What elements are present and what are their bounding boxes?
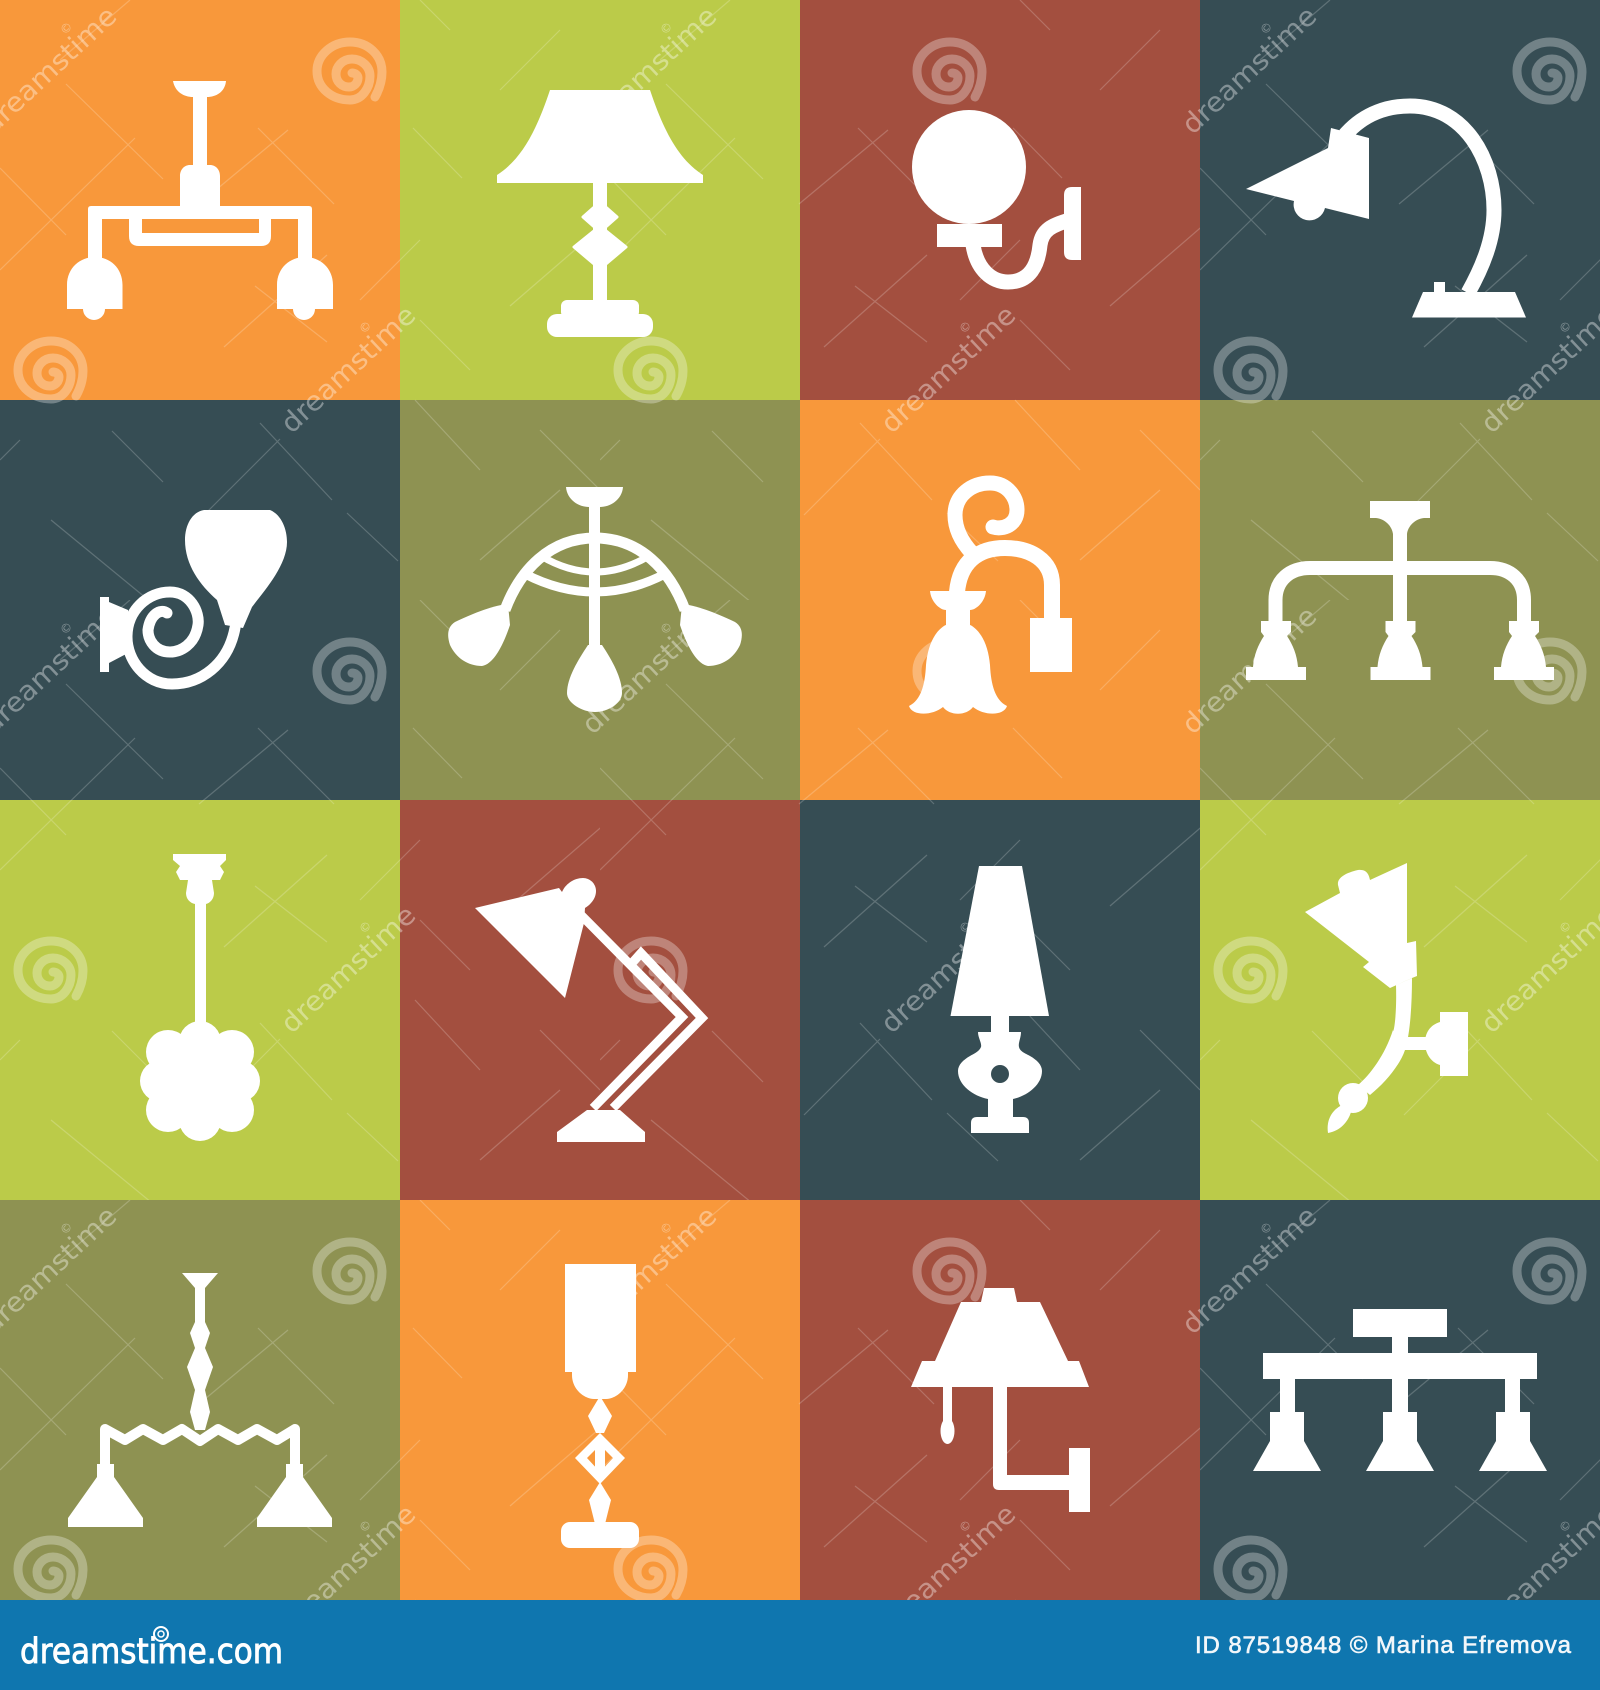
icon: table lamp with flared shade [497,90,703,337]
icon: architect desk lamp [475,878,702,1142]
watermark text: © [657,1219,676,1238]
watermark text: dreamstime [875,900,1022,1040]
watermark text: dreamstime [1176,1,1323,141]
panel: orange chandelier tile [0,0,400,400]
watermark text: © [956,1517,975,1536]
watermark text: dreamstime [875,300,1022,440]
watermark text: dreamstime [275,900,422,1040]
panel: slate bar ceiling lamp tile [1200,1200,1600,1600]
icon: flower sconce with scroll [909,483,1072,714]
watermark text: © [956,918,975,937]
watermark text: dreamstime [576,1201,723,1341]
panel: olive ceiling lamp tile [1200,400,1600,800]
panel: lime curved sconce tile [1200,800,1600,1200]
watermark text: © [356,318,375,337]
panel: rust architect lamp tile [400,800,800,1200]
watermark text: © [1257,619,1276,638]
watermark text: © [657,19,676,38]
icon: globe wall lamp [912,110,1081,282]
icon: spiral sconce [100,510,287,684]
watermark text: dreamstime [275,1499,422,1639]
panel: olive zigzag chandelier tile [0,1200,400,1600]
watermark text: dreamstime [275,300,422,440]
icon: bar ceiling lamp [1253,1309,1547,1471]
panel: lime table lamp tile [400,0,800,400]
watermark text: © [657,619,676,638]
watermark text: © [956,318,975,337]
icon: three-arm chandelier [448,487,742,712]
watermark text: dreamstime [1176,1201,1323,1341]
icon: two-arm chandelier [67,81,333,320]
watermark text: © [57,19,76,38]
panel: rust wall globe tile [800,0,1200,400]
icon: flower pendant [140,854,260,1141]
watermark text: © [1556,1517,1575,1536]
panel: slate desk lamp tile [1200,0,1600,400]
watermark text: dreamstime [576,1,723,141]
icon: curved wall sconce [1305,863,1468,1133]
footer credit: image id and author: ID 87519848 © Marina Efremova [1195,1632,1572,1659]
footer logo: dreamstime.com: dreamstime.com [20,1632,283,1672]
panel: orange flower sconce tile [800,400,1200,800]
panel: slate spiral sconce tile [0,400,400,800]
watermark text: © [356,1517,375,1536]
watermark text: © [1556,318,1575,337]
panel: orange column lamp tile [400,1200,800,1600]
icon: column table lamp [561,1264,639,1548]
watermark text: dreamstime [576,601,723,741]
watermark text: © [1257,1219,1276,1238]
watermark text: © [1257,19,1276,38]
panel: slate vase lamp tile [800,800,1200,1200]
watermark text: © [1556,918,1575,937]
watermark text: dreamstime [875,1499,1022,1639]
footer bar [0,1600,1600,1690]
watermark text: © [57,619,76,638]
icon: bracket wall lamp [911,1288,1090,1512]
panel: lime pendant tile [0,800,400,1200]
panel: olive three-arm chandelier tile [400,400,800,800]
panel: rust bracket wall lamp tile [800,1200,1200,1600]
icon: gooseneck desk lamp [1246,106,1526,318]
watermark text: © [57,1219,76,1238]
icon: zigzag chandelier [68,1273,332,1527]
icon: vase table lamp [950,866,1049,1133]
watermark text: dreamstime [1176,601,1323,741]
icon: three-light ceiling lamp [1246,501,1554,680]
watermark text: © [356,918,375,937]
